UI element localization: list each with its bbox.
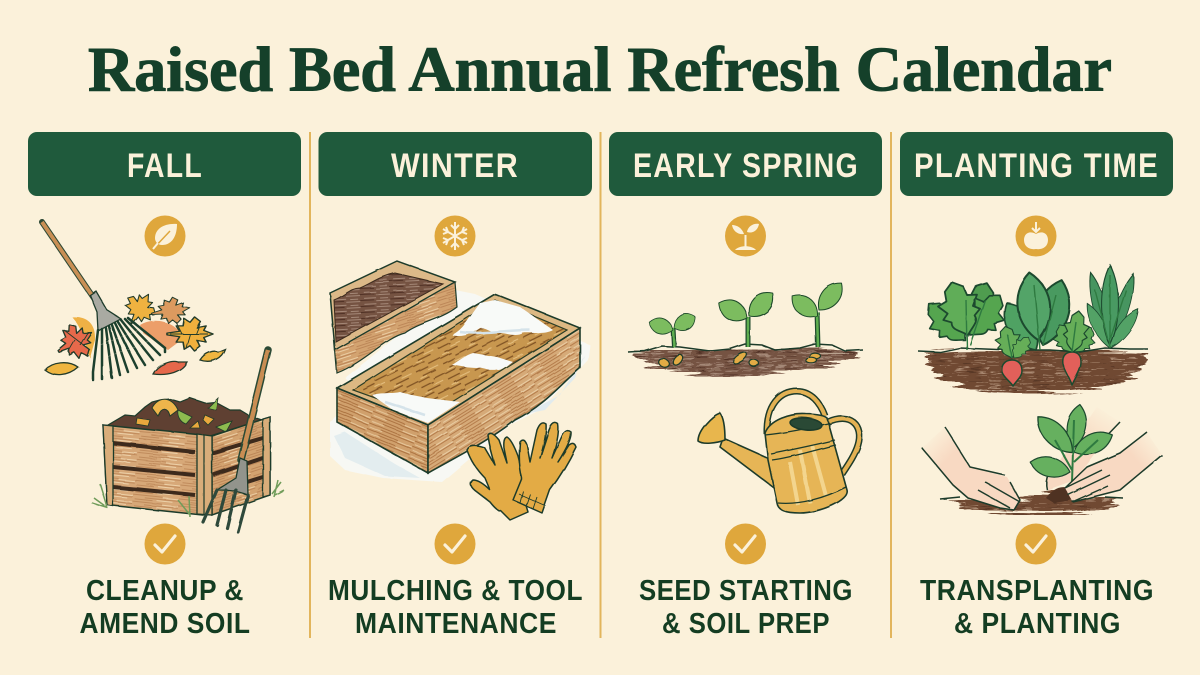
winter caption: MAINTENANCE xyxy=(355,608,557,640)
fall caption: AMEND SOIL xyxy=(80,608,250,640)
planting time caption xyxy=(920,575,1154,640)
winter header xyxy=(318,132,592,196)
planting time caption: & PLANTING xyxy=(954,608,1121,640)
panel: fall xyxy=(28,132,301,640)
planting time header: PLANTING TIME xyxy=(914,147,1159,185)
early spring caption xyxy=(639,575,853,640)
illustration: seedlings in soil xyxy=(628,277,863,377)
panel: early spring xyxy=(609,132,882,640)
illustration: hands transplanting seedling xyxy=(922,403,1162,514)
icon: sprout badge xyxy=(725,216,766,256)
planting time header xyxy=(900,132,1173,196)
illustration: mulched beds with snow xyxy=(330,261,590,482)
early spring caption: & SOIL PREP xyxy=(662,608,830,640)
early spring header: EARLY SPRING xyxy=(633,147,859,185)
title: Raised Bed Annual Refresh Calendar xyxy=(88,34,1112,104)
icon: check badge xyxy=(725,524,766,564)
icon: apple badge xyxy=(1016,216,1056,256)
fall header: FALL xyxy=(127,147,203,185)
fall header xyxy=(28,132,301,196)
planting time caption: TRANSPLANTING xyxy=(920,575,1154,607)
panel: planting time xyxy=(900,132,1173,640)
icon: snowflake badge xyxy=(434,216,476,256)
early spring header xyxy=(609,132,882,196)
illustration: rake and autumn leaves xyxy=(42,222,225,380)
icon: check badge xyxy=(1016,524,1056,564)
illustration: greens and radishes in soil xyxy=(917,265,1148,394)
winter caption: MULCHING & TOOL xyxy=(328,575,583,607)
panel: winter xyxy=(318,132,592,640)
winter caption xyxy=(328,575,583,640)
illustration: watering can xyxy=(698,391,859,513)
illustration: gloves xyxy=(467,423,576,520)
fall caption xyxy=(80,575,250,640)
icon: leaf badge xyxy=(144,216,186,256)
winter header: WINTER xyxy=(391,147,519,185)
icon: check badge xyxy=(144,524,186,564)
early spring caption: SEED STARTING xyxy=(639,575,853,607)
icon: check badge xyxy=(434,524,476,564)
fall caption: CLEANUP & xyxy=(86,575,244,607)
illustration: compost crate and fork xyxy=(92,350,284,532)
